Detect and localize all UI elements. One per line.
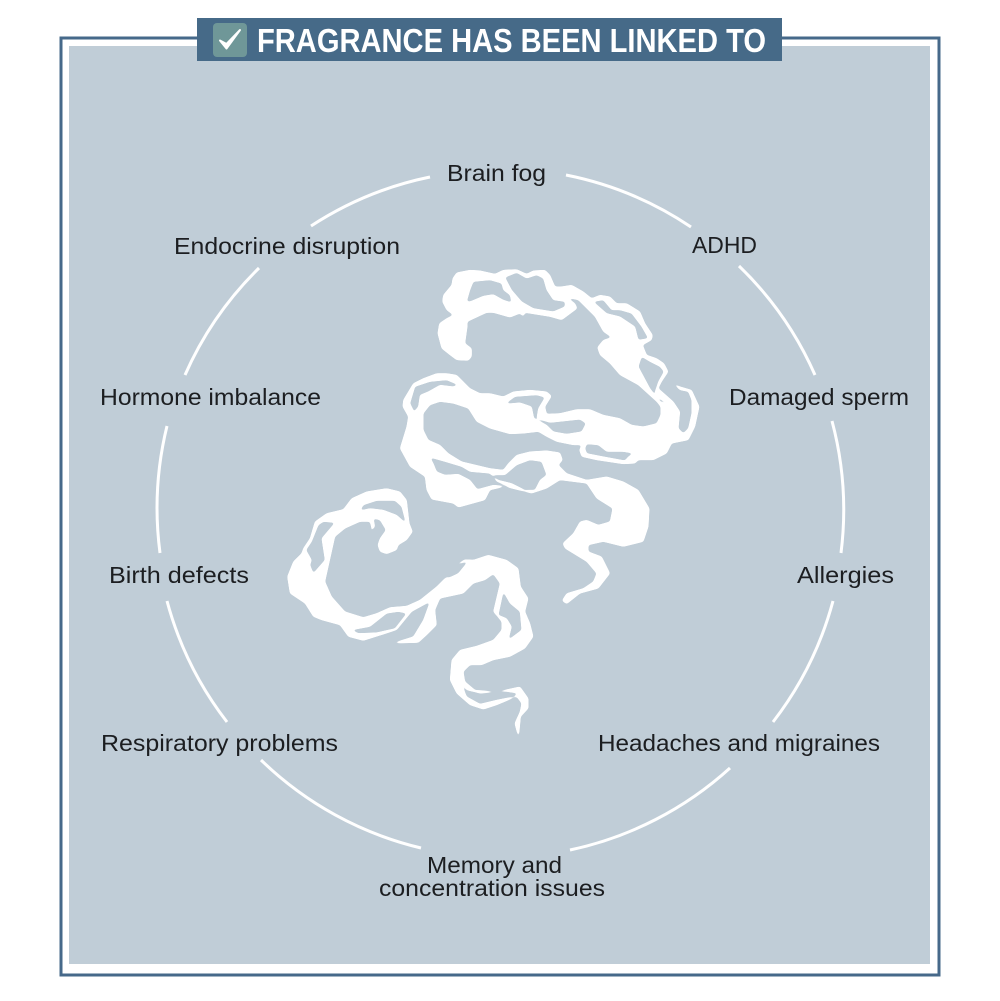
icon: smoke: [287, 269, 699, 738]
label: Memory and concentration issues: [379, 852, 605, 901]
label: Respiratory problems: Respiratory problems: [101, 730, 338, 756]
ring of arcs: [157, 175, 844, 850]
label: Endocrine disruption: Endocrine disruption: [174, 233, 400, 259]
label: Headaches and migraines: Headaches and migraines: [598, 730, 880, 756]
title banner: [197, 18, 782, 61]
icon: check mark: [213, 23, 247, 57]
label: Hormone imbalance: Hormone imbalance: [100, 384, 321, 410]
label: ADHD: ADHD: [692, 232, 757, 258]
label: Memory and concentration issues: Memory and: [427, 852, 562, 878]
title: FRAGRANCE HAS BEEN LINKED TO: [257, 22, 766, 59]
label: Allergies: Allergies: [797, 562, 894, 588]
label: Damaged sperm: Damaged sperm: [729, 384, 909, 410]
label: Birth defects: Birth defects: [109, 562, 249, 588]
label: Brain fog: Brain fog: [447, 160, 546, 186]
label: Memory and concentration issues: concentration issues: [379, 875, 605, 901]
